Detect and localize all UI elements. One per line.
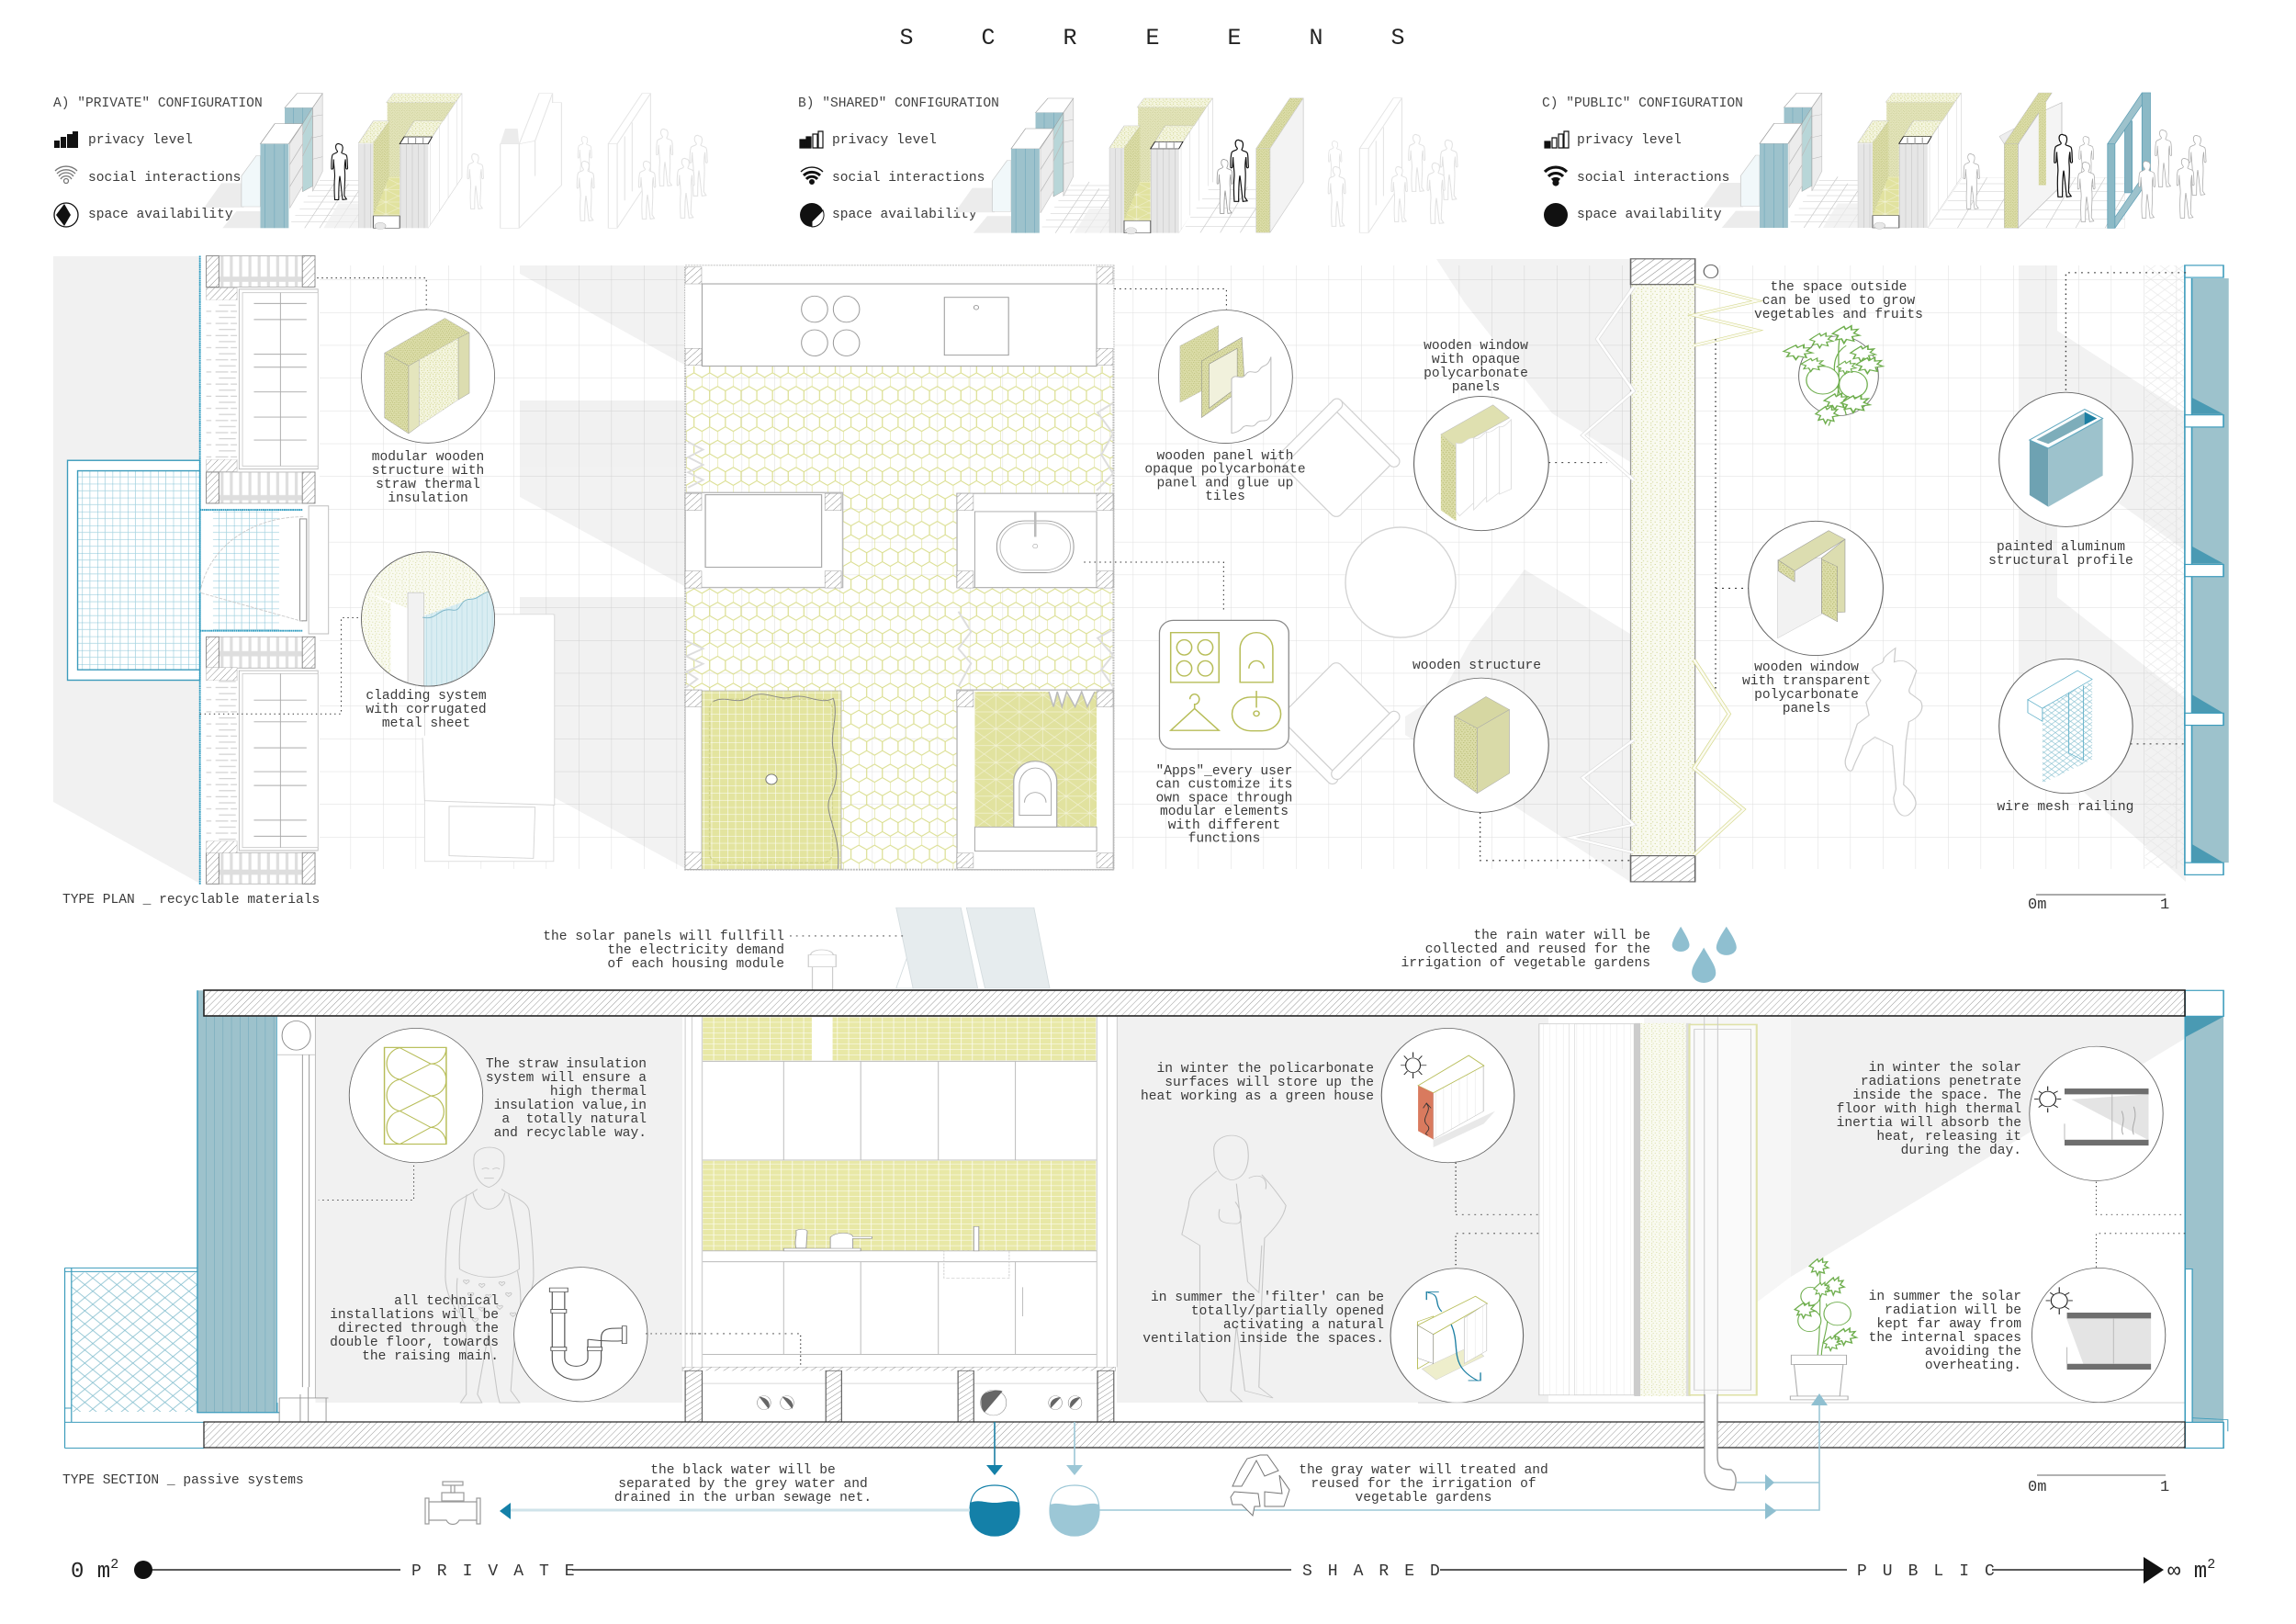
text: plan notes: wire mesh railing (1998, 800, 2133, 815)
text: section notes: activating a natural (1223, 1318, 1384, 1333)
text: section notes: inside the space. The (1852, 1088, 2021, 1103)
leader: winter inertia (2096, 1182, 2185, 1214)
scale bar section: 1 (2160, 1479, 2169, 1496)
floor line (1418, 1402, 2185, 1404)
text: plan notes: panels (1452, 380, 1500, 395)
ghost panels (501, 94, 650, 228)
label: social interactions: social interactions (88, 171, 241, 186)
text: section notes: kept far away from (1876, 1317, 2021, 1332)
text: plan notes: can be used to grow (1762, 294, 1915, 309)
blue frame (2108, 93, 2150, 228)
detail circle: wire mesh railing (1999, 659, 2133, 794)
title: C (981, 25, 996, 51)
label: space availability: space availability (1577, 208, 1722, 222)
text: section notes: overheating. (1925, 1359, 2021, 1373)
text: plan notes: "Apps"_every user (1156, 764, 1292, 779)
text: section notes: of each housing module (607, 957, 784, 972)
leader: transparent window (1716, 339, 1749, 690)
folding panels (686, 403, 1113, 687)
detail circle: summer ventilation (1390, 1269, 1524, 1403)
text: section notes: avoiding the (1925, 1345, 2021, 1359)
axis end label: ∞ m (2167, 1560, 2207, 1585)
text: section notes: radiations penetrate (1861, 1075, 2021, 1089)
text: plan notes: modular elements (1160, 805, 1289, 819)
text: plan notes: TYPE PLAN _ recyclable materials (62, 893, 320, 908)
text: section notes: the raising main. (362, 1349, 499, 1364)
text: section notes: vegetable gardens (1356, 1491, 1491, 1506)
leader: mesh (2131, 743, 2186, 745)
label: social interactions: social interactions (832, 171, 985, 186)
text: section notes: all technical (394, 1294, 499, 1309)
detail circle: wooden structure (1414, 678, 1548, 812)
detail circle: aluminum profile (1999, 392, 2133, 526)
title (899, 25, 1405, 51)
leader: pipes (646, 1333, 740, 1335)
text: section notes: totally/partially opened (1191, 1304, 1384, 1319)
privacy axis (71, 1557, 2215, 1585)
label: privacy level: privacy level (88, 133, 193, 148)
closet upper (239, 289, 318, 469)
text: plan notes: structure with (372, 464, 484, 479)
icon: rain drops (1672, 927, 1737, 983)
scale bar plan: 1 (2160, 897, 2169, 914)
scale bar section: 0m (2028, 1479, 2046, 1496)
person: black outline (2054, 134, 2073, 197)
text: plan notes: opaque polycarbonate (1144, 463, 1306, 478)
heading: private configuration: A) "PRIVATE" CONFIGURATION (53, 96, 263, 111)
text: plan notes: with transparent (1742, 674, 1871, 689)
text: section notes: in winter the solar (1869, 1061, 2021, 1076)
facade wavy line (200, 255, 302, 885)
axis label shared: SHARED (1302, 1562, 1456, 1581)
text: section notes: heat working as a green house (1141, 1089, 1374, 1104)
text: plan notes: with opaque (1432, 353, 1520, 367)
black water tank (970, 1485, 1019, 1536)
text: section notes: radiation will be (1885, 1303, 2021, 1318)
scale bar section (2028, 1475, 2169, 1496)
text: plan notes: straw thermal (376, 478, 480, 492)
left storage block (685, 492, 843, 588)
icon: social interactions low (55, 166, 77, 184)
heading: public configuration: C) "PUBLIC" CONFIGURATION (1542, 96, 1743, 111)
text: section notes: the gray water will treated and (1299, 1463, 1548, 1478)
text: section notes: floor with high thermal (1837, 1102, 2021, 1117)
leader: aluminum (2065, 273, 2186, 393)
downspout (1705, 1394, 1736, 1490)
text: section notes: TYPE SECTION _ passive systems (62, 1473, 304, 1488)
closet lower (239, 671, 318, 851)
heading: shared configuration: B) "SHARED" CONFIGURATION (798, 96, 999, 111)
right section group (1418, 927, 2228, 1448)
leader: opaque window (1548, 461, 1607, 464)
ghost people (467, 129, 707, 220)
text: plan notes: wooden panel with (1157, 449, 1293, 464)
text: plan notes: vegetables and fruits (1754, 308, 1923, 322)
leader: pipes end (680, 1334, 801, 1367)
window section (277, 1017, 328, 1422)
black and grey water drains (986, 1422, 1083, 1475)
text: section notes: during the day. (1901, 1144, 2021, 1158)
detail circle: wooden panel (1158, 310, 1292, 444)
people: grey outlines (1964, 130, 2206, 221)
leader: straw (319, 1166, 414, 1200)
isometric module: private (204, 94, 707, 230)
icon: privacy level full (54, 131, 78, 148)
sewage arrow (500, 1503, 970, 1519)
leader: summer filter (1456, 1234, 1540, 1269)
text: section notes: separated by the grey water and (618, 1477, 868, 1492)
detail circle: pipe trap (514, 1268, 647, 1402)
text: plan notes: structural profile (1988, 554, 2133, 569)
filter panels (1539, 1023, 1640, 1396)
text: section notes: ventilation inside the spaces. (1142, 1332, 1384, 1347)
leader: cladding (200, 618, 362, 714)
roof vent (808, 950, 836, 990)
text: section notes: heat, releasing it (1876, 1130, 2021, 1145)
person from above (1845, 648, 1922, 816)
ghost people (1328, 134, 1458, 226)
detail circle: greenhouse winter (1381, 1028, 1514, 1163)
detail circle: transparent window (1749, 521, 1883, 656)
icon: valve (425, 1482, 480, 1525)
text: section notes: double floor, towards (330, 1336, 499, 1350)
detail circle: cladding system (362, 551, 495, 686)
kitchen (685, 1017, 1117, 1367)
text: plan notes: functions (1188, 832, 1260, 847)
label: space availability: space availability (88, 208, 233, 222)
title: N (1309, 25, 1323, 51)
leader: apps (1084, 562, 1223, 613)
text: plan notes: with corrugated (366, 703, 487, 717)
kitchen counter (685, 265, 1113, 367)
text: plan notes: polycarbonate (1424, 367, 1528, 381)
leader: summer shade (2096, 1234, 2185, 1268)
text: section notes: directed through the (338, 1322, 499, 1336)
axis start label: 0 m (71, 1560, 110, 1585)
label: space availability: space availability (832, 208, 977, 222)
toilet (957, 690, 1113, 870)
title: S (1390, 25, 1405, 51)
text: section notes: drained in the urban sewage net. (614, 1491, 872, 1506)
axis arrow head (2144, 1557, 2164, 1584)
slabs (204, 990, 2185, 1448)
text: plan notes: panels (1783, 702, 1830, 716)
text: section notes (62, 929, 2021, 1506)
text: section notes: the internal spaces (1869, 1331, 2021, 1346)
icon: space availability large (800, 203, 824, 227)
text: plan notes: panel and glue up (1157, 476, 1293, 491)
text: section notes: system will ensure a (486, 1071, 647, 1086)
title: S (899, 25, 914, 51)
panel: public configuration (1542, 93, 2206, 229)
icon: recycling (1231, 1455, 1289, 1516)
arrow heads (1765, 1393, 1828, 1519)
kitchen elevation (680, 908, 1540, 1422)
blue facade (197, 990, 280, 1413)
railing (65, 1268, 204, 1448)
text: plan notes: tiles (1205, 490, 1245, 504)
axis line (143, 1569, 2145, 1571)
hexagon tile floor (685, 265, 1113, 870)
text: section notes: the electricity demand (607, 943, 784, 958)
scale bar plan (2028, 895, 2169, 914)
text: section notes: installations will be (330, 1308, 499, 1323)
scale bar plan: 0m (2028, 897, 2046, 914)
text: section notes: inertia will absorb the (1837, 1116, 2021, 1131)
sun shadow wedge (1791, 1017, 2186, 1277)
icon: social interactions medium (801, 167, 823, 184)
text: section notes: in winter the policarbonate (1157, 1062, 1374, 1077)
text: section notes: the rain water will be (1473, 929, 1650, 943)
text: section notes: high thermal (550, 1085, 647, 1100)
title: E (1145, 25, 1160, 51)
speckled wall (1256, 98, 1303, 232)
text: section notes: collected and reused for the (1425, 942, 1650, 957)
shower (685, 690, 841, 870)
label: privacy level: privacy level (1577, 133, 1682, 148)
left section group (65, 990, 740, 1448)
balcony with wire mesh (68, 460, 279, 680)
text: section notes: reused for the irrigation of (1311, 1477, 1536, 1492)
floor extension (1928, 177, 2125, 228)
right facade (2185, 990, 2228, 1448)
text: section notes: surfaces will store up the (1165, 1076, 1374, 1090)
text: plan notes: metal sheet (382, 716, 470, 731)
central service core (685, 265, 1292, 870)
right facade (2185, 265, 2229, 874)
text: section notes: irrigation of vegetable gardens (1401, 956, 1650, 971)
speckled frame (1999, 93, 2062, 228)
icon: tomato plant in pot (1790, 1258, 1856, 1400)
bed (422, 615, 555, 862)
speckled column (1640, 1023, 1686, 1396)
icon: privacy level medium (800, 131, 823, 148)
text: plan notes: painted aluminum (1997, 540, 2125, 555)
double floor (682, 1367, 1116, 1422)
leader: winter filter (1456, 1163, 1540, 1214)
folding panels yellow (1694, 285, 1757, 855)
door (200, 506, 329, 634)
text: section notes: the solar panels will fullfill (543, 930, 784, 944)
person: black outline (1231, 140, 1248, 201)
text: section notes: a totally natural (501, 1112, 647, 1127)
left wall assembly (68, 255, 555, 885)
icon: plant from above (1784, 326, 1883, 425)
text: plan notes: wooden window (1424, 339, 1528, 354)
text: section notes: in summer the solar (1869, 1290, 2021, 1304)
wire mesh band (2145, 265, 2185, 868)
title: E (1227, 25, 1242, 51)
leader: wooden structure (1480, 812, 1631, 861)
text: plan notes: own space through (1156, 791, 1292, 806)
apps card (1159, 620, 1289, 749)
text: plan notes: modular wooden (372, 450, 484, 465)
wash basin block (957, 493, 1113, 588)
transparent panel (1686, 1017, 1757, 1396)
text: section notes: The straw insulation (486, 1057, 647, 1072)
person: man in vest (445, 1147, 534, 1403)
table (1345, 527, 1456, 637)
person: man in suit (1182, 1135, 1286, 1402)
armchairs (1267, 397, 1401, 786)
text: plan notes: with different (1168, 818, 1280, 833)
isometric module: shared (955, 98, 1458, 234)
plan shadows (520, 259, 2186, 882)
downpipe circle (1704, 265, 1718, 278)
panel: type section (62, 908, 2228, 1536)
text: section notes: and recyclable way. (494, 1126, 647, 1141)
icon: space availability half (54, 203, 78, 227)
plan grid (320, 265, 2186, 869)
detail circle: straw insulation (349, 1028, 483, 1163)
leader: solar (790, 935, 904, 937)
detail circle: winter sun (2030, 1046, 2163, 1180)
floor extension (1179, 182, 1256, 232)
axis label private: PRIVATE (411, 1562, 591, 1581)
grey water tank (1050, 1485, 1099, 1536)
axis start label: 2 (110, 1557, 118, 1573)
text: section notes: the black water will be (650, 1463, 836, 1478)
icon: space availability full (1544, 203, 1568, 227)
text: plan notes (62, 280, 2133, 908)
panel: shared configuration (798, 96, 1458, 234)
axis label public: PUBLIC (1857, 1562, 2010, 1581)
label: social interactions: social interactions (1577, 171, 1729, 186)
left shadow (53, 256, 200, 884)
axis end label: 2 (2207, 1557, 2215, 1573)
title: R (1063, 25, 1077, 51)
icon: privacy level low (1545, 131, 1569, 148)
text: plan notes: polycarbonate (1754, 688, 1859, 703)
leader: modular structure (317, 278, 426, 310)
person: black outline (332, 143, 348, 199)
axis start dot (134, 1561, 152, 1579)
wall blocks (207, 255, 315, 884)
text: plan notes: cladding system (366, 689, 487, 704)
icon: social interactions high (1545, 167, 1567, 185)
text: plan notes: can customize its (1156, 778, 1292, 793)
right hand plan elements (1414, 259, 2229, 882)
folding panels white (1570, 287, 1634, 852)
panel: type plan (53, 255, 2229, 914)
central speckled column (1631, 259, 1695, 882)
panel: private configuration (53, 94, 707, 230)
text: section notes: in summer the 'filter' can be (1151, 1291, 1384, 1305)
leader: wooden panel (1114, 289, 1226, 310)
isometric module: public (1704, 93, 2206, 229)
text: plan notes: insulation (388, 491, 468, 506)
text: plan notes: the space outside (1771, 280, 1907, 295)
grey water pipes (1099, 1405, 1819, 1510)
label: privacy level: privacy level (832, 133, 937, 148)
detail circle: summer sun (2032, 1268, 2166, 1403)
person: grey outline (1217, 159, 1232, 213)
detail circle: modular wooden structure (362, 310, 495, 443)
text: plan notes: wooden window (1754, 660, 1859, 675)
detail circle: opaque window (1414, 396, 1548, 531)
text: section notes: insulation value,in (494, 1099, 647, 1113)
text: plan notes: wooden structure (1412, 659, 1541, 673)
solar panels (896, 908, 1050, 988)
interior backgrounds (315, 1017, 1548, 1403)
